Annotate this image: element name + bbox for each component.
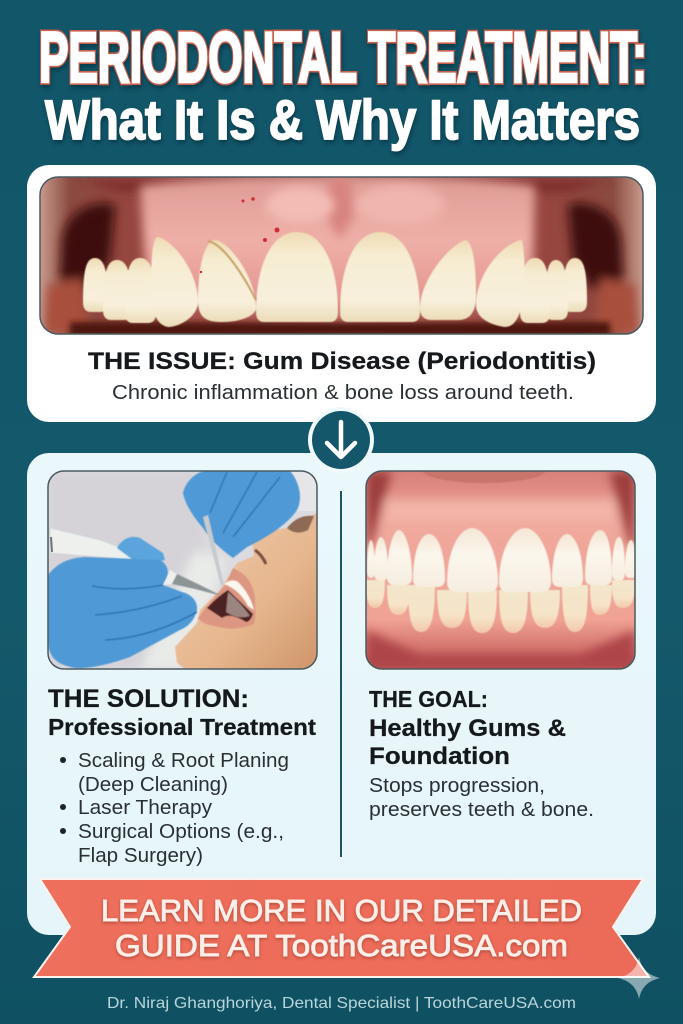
treatment list: Scaling & Root Planing xyxy=(78,749,289,772)
teeth back left xyxy=(83,258,108,312)
goal text: Foundation xyxy=(369,743,510,770)
upper lip xyxy=(423,472,545,483)
panel: the issue xyxy=(27,165,656,422)
column divider xyxy=(340,491,342,857)
upper teeth xyxy=(367,528,637,592)
solution subheading: Professional Treatment xyxy=(48,714,316,740)
goal description: Stops progression, xyxy=(369,775,545,797)
treatment list: Laser Therapy xyxy=(78,796,213,819)
upper hand and probe xyxy=(183,471,300,586)
scaler body xyxy=(50,528,135,560)
ribbon text: LEARN MORE IN OUR DETAILED xyxy=(101,893,582,928)
canines xyxy=(151,237,198,327)
call to action ribbon xyxy=(34,879,649,977)
solution heading: THE SOLUTION: xyxy=(48,685,249,713)
teeth back right xyxy=(563,258,587,312)
gloved hand xyxy=(48,537,197,668)
issue description: Chronic inflammation & bone loss around teeth. xyxy=(112,382,574,404)
central right xyxy=(340,232,420,322)
ribbon text: GUIDE AT ToothCareUSA.com xyxy=(115,928,568,963)
patient face xyxy=(175,513,317,669)
treatment list xyxy=(60,749,289,867)
central left xyxy=(256,232,338,322)
treatment list: Surgical Options (e.g., xyxy=(78,820,284,843)
goal text xyxy=(369,686,594,821)
panel: solution and goal xyxy=(27,453,656,935)
blood spots xyxy=(200,197,280,273)
photo: dental treatment xyxy=(48,471,317,669)
solution text xyxy=(48,685,316,867)
goal subheading: Healthy Gums & xyxy=(369,715,566,742)
goal text: preserves teeth & bone. xyxy=(369,799,594,821)
issue heading: THE ISSUE: Gum Disease (Periodontitis) xyxy=(88,348,596,375)
goal heading: THE GOAL: xyxy=(369,686,488,712)
scaler tip xyxy=(163,570,222,596)
lower teeth xyxy=(366,580,635,633)
footer credit: Dr. Niraj Ghanghoriya, Dental Specialist | ToothCareUSA.com xyxy=(107,995,576,1012)
mouth xyxy=(198,568,255,629)
treatment list: Flap Surgery) xyxy=(78,844,203,867)
icon: sparkle xyxy=(618,957,660,999)
title xyxy=(39,19,647,151)
treatment list: (Deep Cleaning) xyxy=(78,773,228,796)
photo: inflamed gums xyxy=(40,176,643,336)
icon: down arrow badge xyxy=(308,407,374,473)
photo: healthy gums xyxy=(366,457,637,669)
laterals xyxy=(198,240,256,322)
ribbon text xyxy=(101,893,582,963)
